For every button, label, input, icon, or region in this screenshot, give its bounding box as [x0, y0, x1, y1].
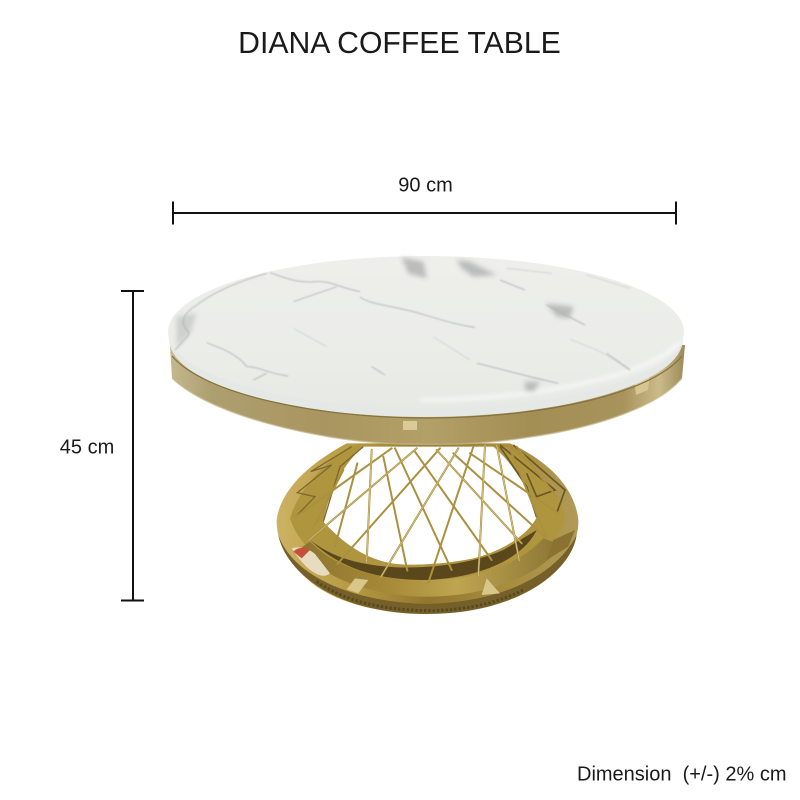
marble veins: [175, 273, 630, 383]
left lattice: [295, 447, 363, 522]
gold apron band: [170, 345, 685, 444]
band highlight: [403, 421, 417, 430]
base rim speckled edge: [317, 582, 523, 611]
band bright lower line: [172, 378, 682, 444]
height dimension: 45 cm: 45 cm: [60, 436, 114, 458]
floor reflection: [300, 538, 562, 597]
highlight patches: [292, 547, 330, 576]
width dimension: 90 cm: [173, 174, 676, 224]
gold trim line: [172, 356, 682, 418]
right lattice: [500, 445, 565, 517]
floor shadow under opening: [310, 530, 537, 580]
table base: gold wire pedestal: [277, 443, 578, 614]
opening: [323, 447, 537, 565]
title: DIANA COFFEE TABLE: [238, 27, 561, 60]
dimension tolerance note: Dimension (+/-) 2% cm: [577, 764, 786, 786]
band right highlight: [634, 372, 650, 395]
base rim: [278, 535, 577, 614]
width dimension: 90 cm: 90 cm: [398, 174, 453, 196]
height dimension: 45 cm: [60, 291, 144, 600]
top edge: [169, 261, 683, 417]
edge highlight: [420, 342, 680, 400]
grey marble clouds: [177, 257, 573, 392]
top surface: [168, 256, 684, 408]
wires: [295, 445, 558, 583]
inner bevel: [290, 447, 565, 593]
faint veins: [293, 268, 630, 370]
base plate: [277, 443, 578, 613]
marble table top: [168, 256, 684, 418]
